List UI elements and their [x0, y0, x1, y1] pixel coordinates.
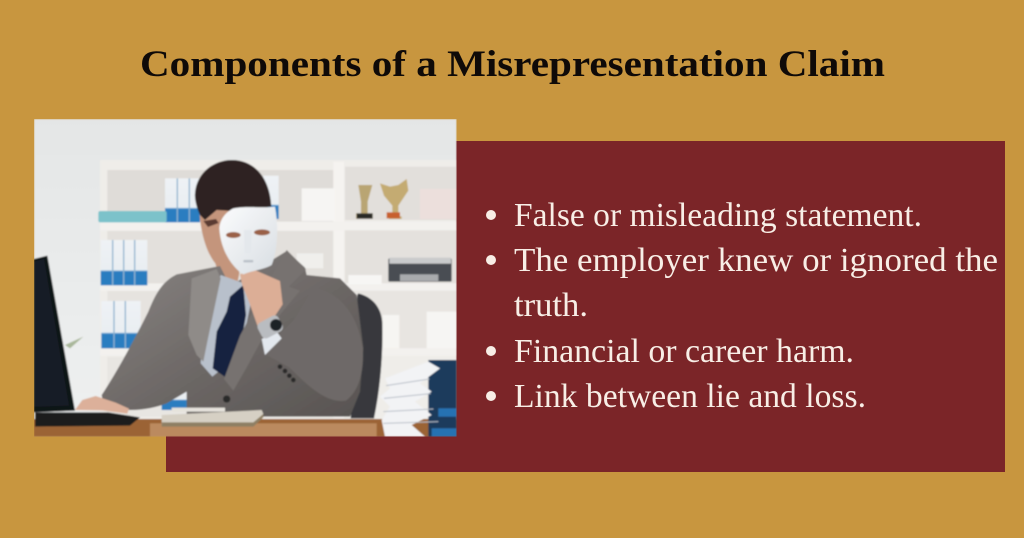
shelf objects [65, 179, 457, 348]
paper stacks and dark binders [380, 360, 457, 437]
photo: businessman holding a white mask [34, 119, 457, 437]
monitor [34, 256, 75, 412]
bullet 3: Financial or career harm. [514, 333, 854, 370]
shirt and tie [201, 275, 251, 383]
bullet list [486, 197, 998, 415]
suit jacket [102, 251, 363, 417]
bullet 4: Link between lie and loss. [514, 378, 866, 415]
title: Components of a Misrepresentation Claim [140, 44, 885, 85]
hand and watch [240, 269, 285, 355]
books on desk [162, 408, 263, 427]
keyboard and hand [35, 396, 140, 427]
panel: burgundy content background [166, 141, 1005, 472]
mask [219, 207, 277, 274]
bookshelf [100, 160, 457, 420]
blue binders [98, 176, 279, 410]
buttons [223, 364, 296, 403]
bullet 1: False or misleading statement. [514, 197, 922, 234]
chair [351, 293, 382, 418]
wall [34, 119, 457, 437]
lapels [188, 269, 221, 362]
bullet 2 [486, 242, 998, 324]
forearm [282, 317, 364, 401]
desk [34, 419, 457, 437]
face and neck [199, 207, 239, 282]
bullet 2: truth. [514, 287, 588, 324]
hair [195, 160, 271, 220]
bullet 2: The employer knew or ignored the [514, 242, 998, 279]
